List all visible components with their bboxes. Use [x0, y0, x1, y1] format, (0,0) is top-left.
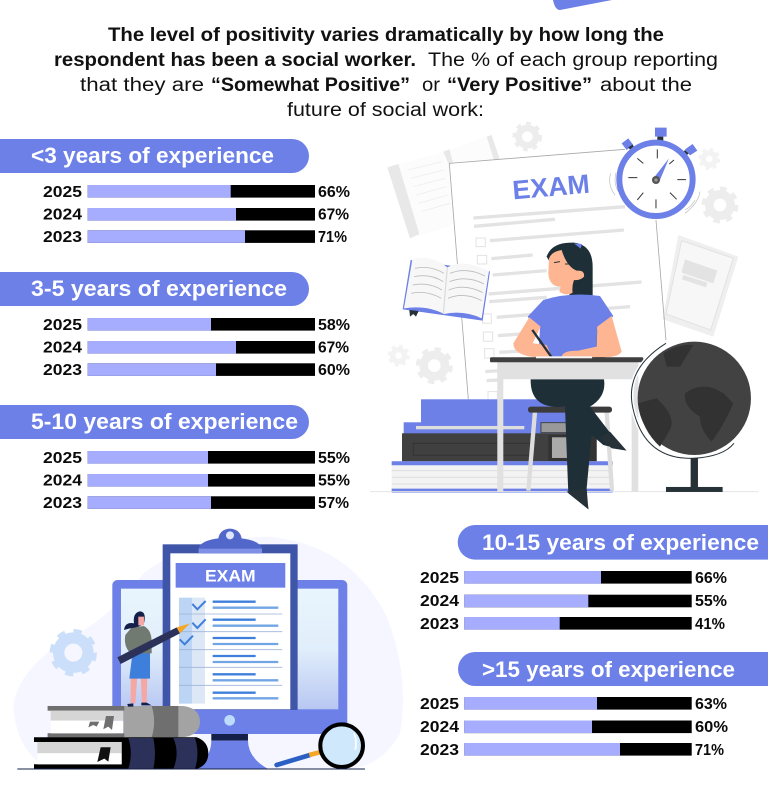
panel: 3-5 years of experience	[0, 272, 350, 379]
heading text: “Somewhat Positive”	[211, 75, 410, 96]
icon: seated student	[513, 243, 627, 509]
panel: over 15 years of experience: >15 years of experience	[482, 657, 735, 682]
checklist	[179, 598, 282, 704]
paper lines and checkboxes	[473, 207, 642, 400]
panel: 10-15 years of experience: 66%	[695, 570, 727, 587]
panel: 3-5 years of experience: 2023	[43, 362, 82, 379]
panel: 10-15 years of experience	[420, 525, 768, 633]
heading text: The level of positivity varies dramatically by how long the	[108, 25, 664, 46]
panel: 3-5 years of experience: 3-5 years of experience	[31, 276, 287, 301]
panel: 3-5 years of experience: 67%	[318, 340, 349, 356]
panel: 3-5 years of experience: 60%	[318, 362, 350, 379]
panel: over 15 years of experience: 60%	[695, 719, 728, 736]
panel: 10-15 years of experience: 10-15 years of experience	[482, 530, 759, 555]
panel: 10-15 years of experience: 2023	[420, 616, 459, 633]
icon: background open book	[387, 135, 500, 238]
icon: globe	[631, 342, 751, 492]
panel: 5-10 years of experience: 57%	[318, 495, 349, 512]
panel: 10-15 years of experience: 2024	[420, 593, 459, 610]
top edge blue shape	[553, 0, 612, 10]
panel: 5-10 years of experience: 55%	[318, 472, 350, 490]
clipboard title EXAM	[176, 563, 285, 588]
panel: under 3 years of experience: 66%	[318, 184, 350, 201]
background blob	[13, 537, 403, 769]
panel: over 15 years of experience	[420, 652, 768, 759]
panel: under 3 years of experience: 2023	[43, 229, 82, 246]
icon: tablet	[663, 235, 738, 337]
icon: clipboard	[163, 529, 298, 710]
panel: under 3 years of experience: 67%	[318, 206, 349, 224]
icon: magnifying glass	[277, 724, 363, 767]
icon: gear	[52, 632, 94, 674]
paper title EXAM: EXAM	[511, 169, 591, 205]
panel: over 15 years of experience: 2025	[420, 696, 459, 713]
panel: 5-10 years of experience: 2025	[43, 450, 82, 467]
icon: books	[34, 706, 208, 769]
panel: 5-10 years of experience: 5-10 years of experience	[31, 409, 298, 434]
panel: 3-5 years of experience: 58%	[318, 317, 350, 334]
heading text: The % of each group reporting	[428, 50, 718, 71]
icon: open book with blue cover	[403, 258, 490, 321]
panel: 3-5 years of experience: 2025	[43, 317, 82, 334]
ground line	[17, 767, 365, 770]
clipboard title EXAM: EXAM	[205, 566, 256, 585]
icon: monitor	[112, 580, 347, 769]
panel: 10-15 years of experience: 41%	[695, 616, 725, 633]
panel: over 15 years of experience: 63%	[695, 696, 727, 713]
heading text: “Very Positive”	[447, 75, 592, 96]
heading text: or	[422, 75, 441, 96]
panel: under 3 years of experience	[0, 139, 350, 246]
panel: over 15 years of experience: 2024	[420, 719, 459, 736]
panel: under 3 years of experience: 2025	[43, 184, 82, 201]
icon: desk	[490, 356, 643, 492]
icon: gears top and left	[389, 124, 736, 382]
heading text	[54, 25, 718, 121]
panel: over 15 years of experience: 71%	[695, 742, 724, 759]
icon: woman with giant pencil	[117, 611, 190, 707]
panel: under 3 years of experience: 71%	[318, 229, 347, 246]
panel: over 15 years of experience: 2023	[420, 742, 459, 759]
panel: 5-10 years of experience: 2024	[43, 472, 82, 490]
icon: chair	[528, 327, 612, 491]
heading text: respondent has been a social worker.	[54, 50, 416, 71]
icon: stopwatch	[610, 128, 700, 216]
ground line	[370, 490, 758, 493]
exam paper	[449, 149, 666, 403]
heading text: future of social work:	[287, 100, 484, 121]
icon: stack of books	[392, 399, 613, 492]
panel: 5-10 years of experience: 2023	[43, 495, 82, 512]
panel: 10-15 years of experience: 55%	[695, 593, 727, 610]
panel: 3-5 years of experience: 2024	[43, 340, 82, 356]
heading text: that they are	[80, 75, 204, 96]
illustration: student taking exam at desk	[370, 124, 758, 509]
panel: 5-10 years of experience	[0, 405, 350, 512]
panel: 5-10 years of experience: 55%	[318, 450, 350, 467]
panel: 10-15 years of experience: 2025	[420, 570, 459, 587]
illustration: clipboard exam on monitor	[13, 529, 403, 769]
heading text: about the	[600, 75, 692, 96]
panel: under 3 years of experience: <3 years of experience	[31, 143, 274, 168]
panel: under 3 years of experience: 2024	[43, 206, 82, 224]
